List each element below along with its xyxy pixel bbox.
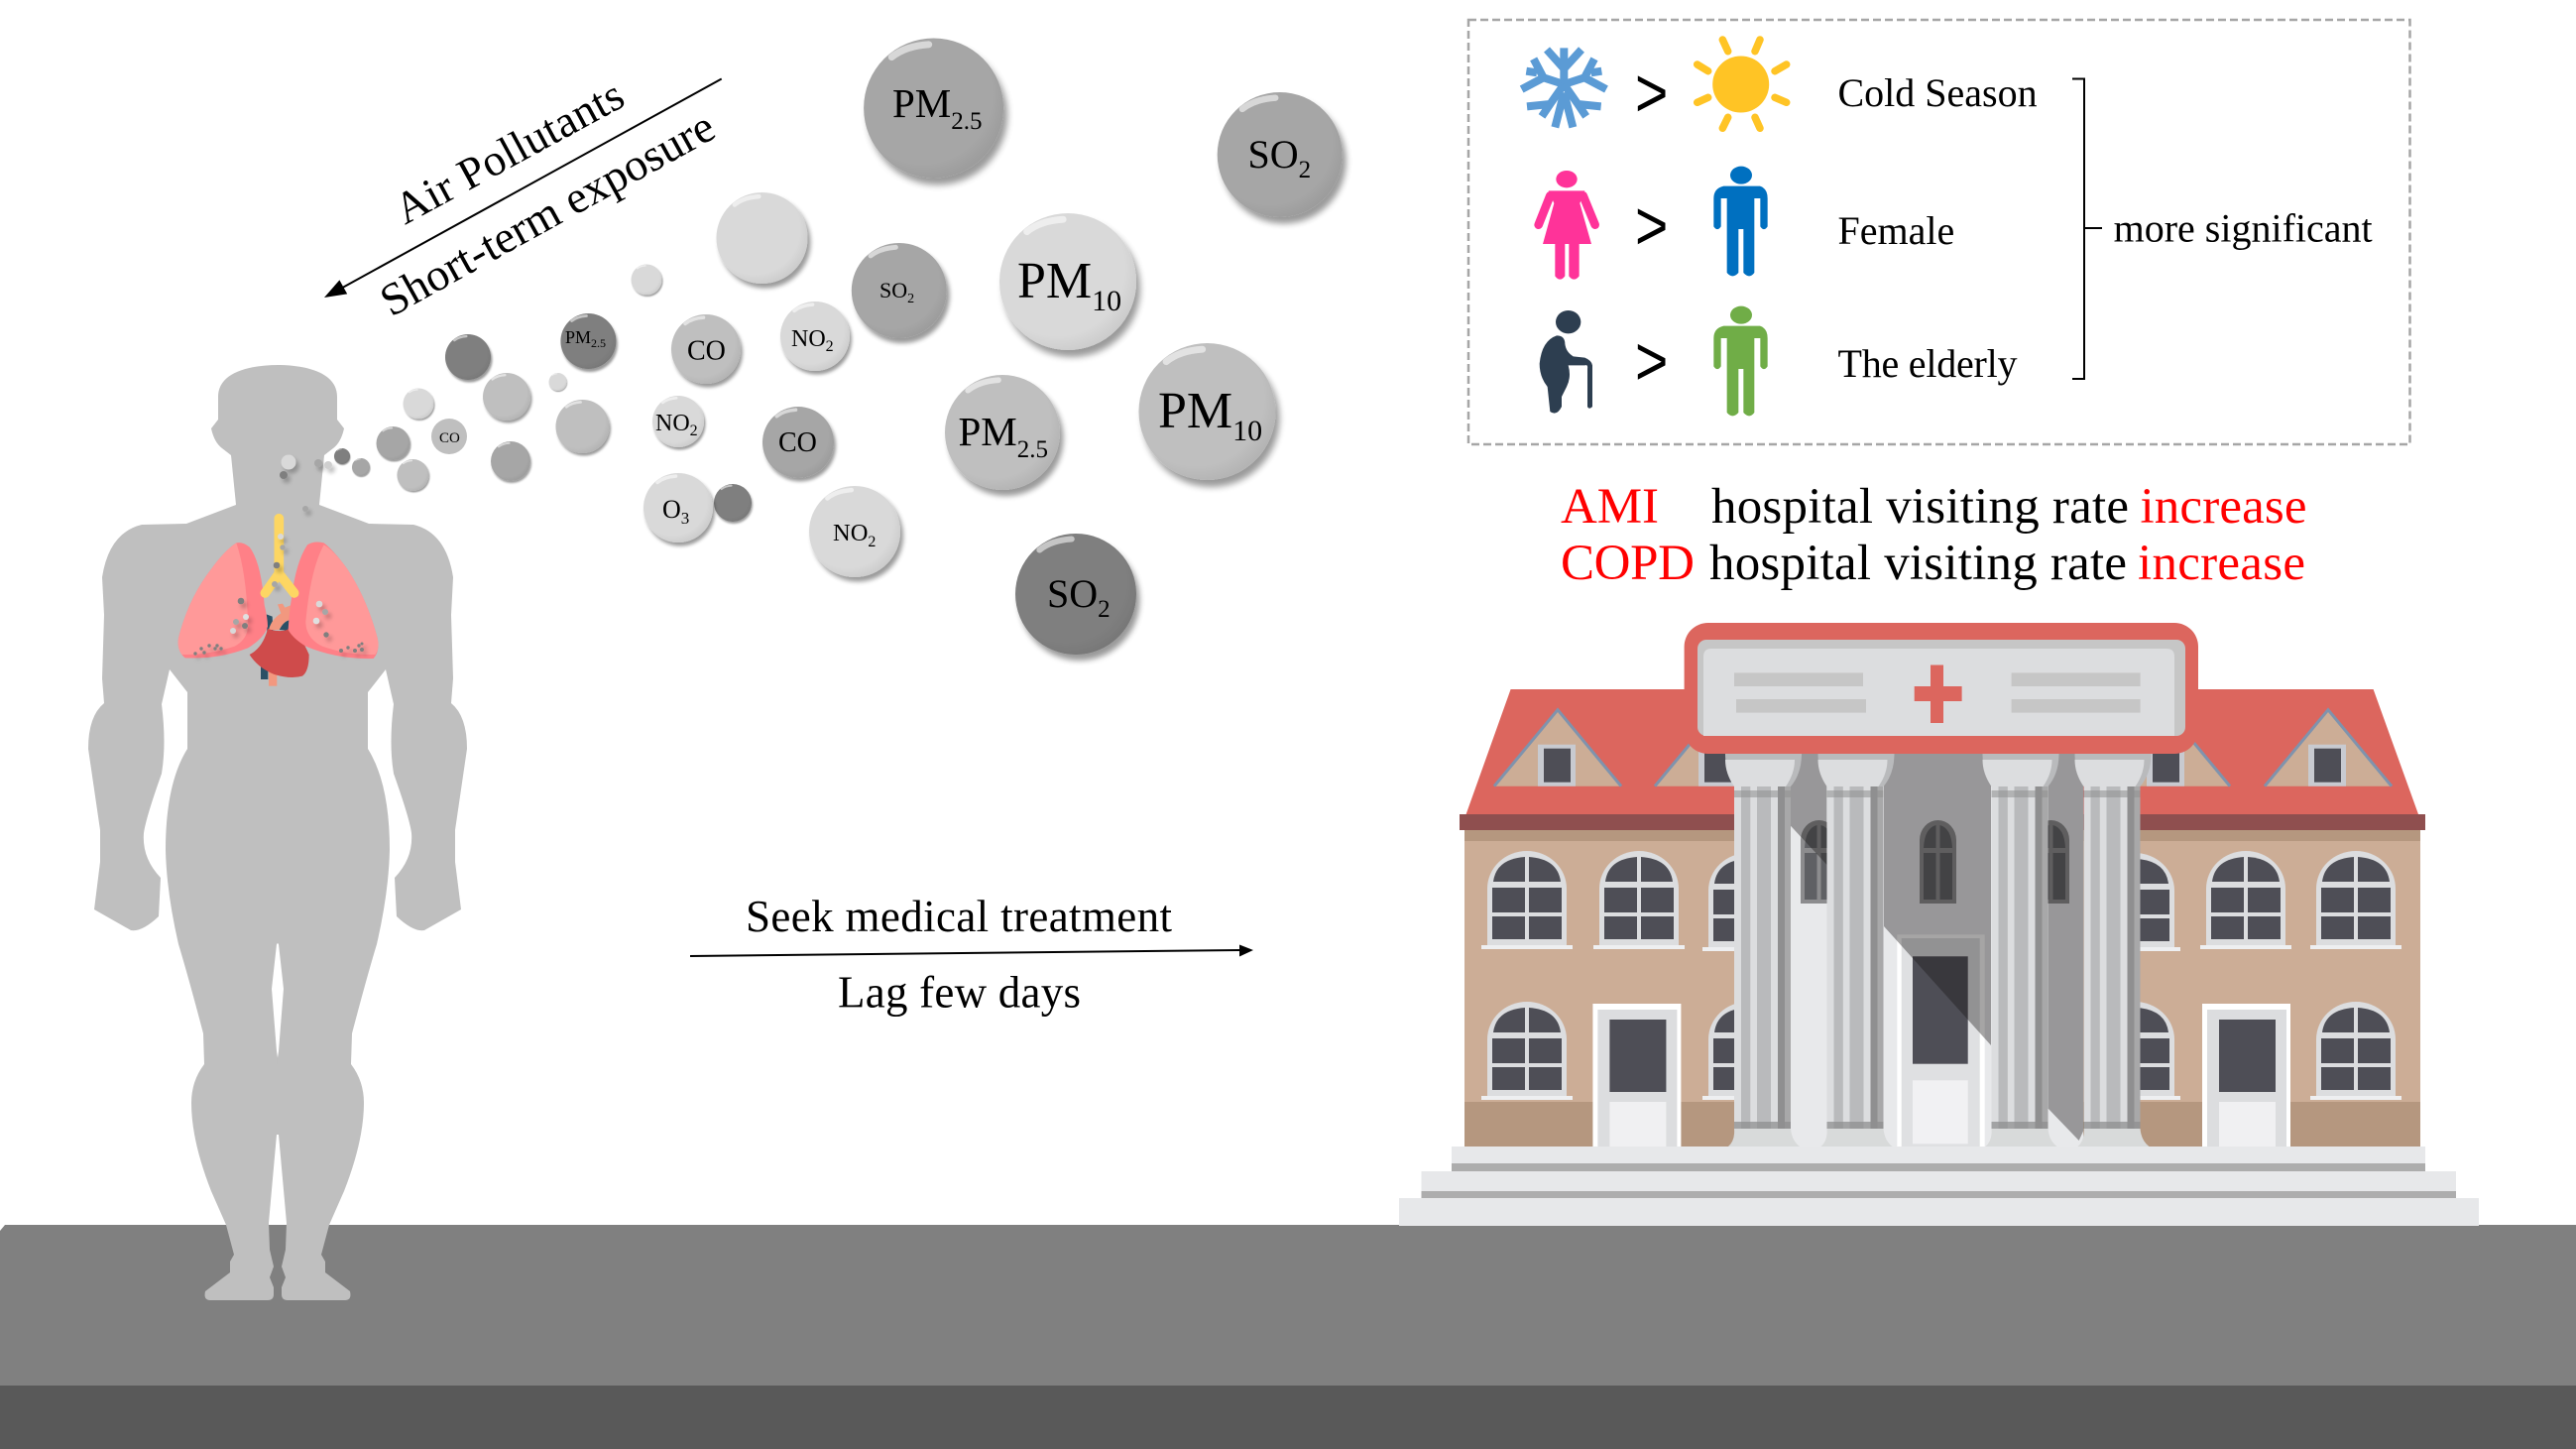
bubble: SO2 dark [1015,534,1136,655]
bubble: O3: 3 [681,509,689,528]
central portico back wall [1791,754,2083,1147]
bubble: CO light: CO [687,335,726,367]
label: Air Pollutants: Air Pollutants [386,69,632,234]
bubble: PM10 right: PM [1158,383,1232,439]
COPD result line: increase [2138,536,2305,591]
columns [1725,754,2152,1147]
bubble: PM2.5 top [864,38,1003,179]
bubble: PM2.5 middle [945,375,1060,490]
bubble: CO medium [762,407,834,478]
bubble: PM2.5 top: 2.5 [951,108,983,135]
inhaled particles in airway and lungs [193,454,364,656]
bubble: PM2.5 middle: PM [958,409,1017,454]
bubble: SO2 top right [1218,92,1343,217]
pollutant bubbles [334,38,1343,655]
bubble: NO2 bottom [809,486,900,577]
ground [0,1225,2576,1449]
COPD result line: hospital visiting rate [1709,536,2127,591]
icon: medical cross [1915,664,1962,723]
bubble: PM2.5 small [560,313,616,369]
bubble: PM10 right [1138,343,1275,480]
bubble: SO2 top right: SO [1247,132,1299,177]
bubble: PM2.5 small: 2.5 [591,336,606,350]
small blank bubbles [334,264,662,491]
bubble: SO2 small [852,243,947,338]
AMI result line [1561,479,2306,535]
bubble: blank light [716,192,807,284]
greater than: > [1635,54,1668,132]
label: Cold Season: Cold Season [1838,70,2038,115]
COPD result line: COPD [1561,536,1695,591]
walls [1460,814,2425,1147]
greater than: > [1635,186,1668,265]
bubble: NO2 middle: NO [655,411,690,436]
right lung [289,543,379,659]
bubble: NO2 bottom: NO [833,520,868,546]
dormer windows [1494,710,2392,786]
bubble: CO light [671,314,741,384]
bubble: SO2 dark: SO [1047,571,1098,616]
roof [1466,689,2418,814]
bubble: NO2 upper [780,302,850,371]
human body silhouette [88,365,467,1300]
bubble: NO2 middle: 2 [690,423,698,439]
lungs, trachea and heart [178,519,379,686]
bubble: NO2 middle [652,396,704,447]
greater than: > [1635,321,1668,400]
bubble: PM2.5 middle: 2.5 [1017,436,1048,463]
bubble: NO2 upper: 2 [826,338,834,355]
bubble: PM2.5 small: PM [565,327,591,347]
bubble: NO2 bottom: 2 [868,534,876,550]
icon: female [1539,171,1595,280]
label: more significant: more significant [2114,206,2373,250]
AMI result line: AMI [1561,479,1659,535]
hospital building [1399,623,2479,1226]
bubble: PM10 upper [999,213,1136,350]
heart [250,604,309,686]
icon: male blue [1713,167,1768,276]
bubble: PM10 right: 10 [1232,415,1262,447]
label: Seek medical treatment: Seek medical treatment [746,892,1172,941]
label: Short-term exposure: Short-term exposure [372,100,723,326]
portico shadows [1791,754,2083,1141]
bubble: SO2 dark: 2 [1098,596,1111,623]
bubble: PM2.5 top: PM [892,80,951,126]
panel: susceptible groups [1468,20,2409,444]
seek treatment arrow [690,944,1253,956]
icon: sun [1698,40,1787,128]
bubble: CO tiny [431,419,467,454]
bubble: SO2 top right: 2 [1299,157,1311,183]
bracket [2072,79,2102,379]
bubble: CO tiny: CO [439,430,460,446]
windows and side doors [1481,851,2401,1147]
bubble: O3: O [662,495,681,524]
bubble: O3 [644,473,713,543]
inhalation arrow [324,79,722,298]
bubble: SO2 small: SO [879,278,907,302]
hospital sign [1685,623,2198,754]
bubble: CO medium: CO [778,427,817,458]
icon: elderly person [1540,310,1592,414]
left lung [178,543,268,659]
bubble: PM10 upper: 10 [1092,285,1121,317]
trachea [265,519,294,593]
AMI result line: increase [2140,479,2306,535]
bubble: NO2 upper: NO [791,326,826,352]
COPD result line [1561,536,2305,591]
label: Female: Female [1838,208,1954,253]
icon: snowflake [1522,48,1606,127]
bubble: SO2 small: 2 [907,292,914,306]
icon: male green [1713,306,1768,416]
label: Lag few days: Lag few days [838,968,1081,1018]
label: The elderly: The elderly [1838,341,2017,386]
AMI result line: hospital visiting rate [1711,479,2129,535]
bubble: PM10 upper: PM [1017,253,1092,309]
bubble: small dark [714,484,752,522]
entrance steps [1399,1147,2479,1226]
